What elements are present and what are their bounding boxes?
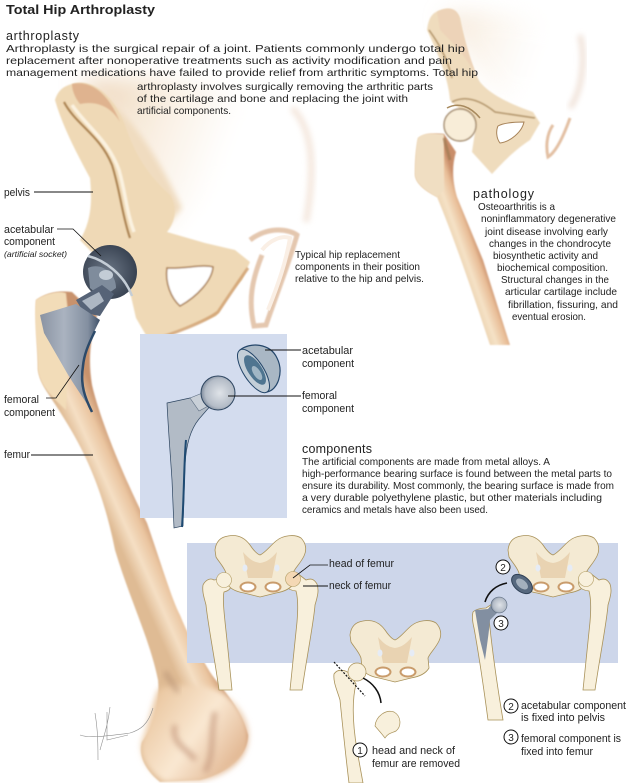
step 1 caption: head and neck of xyxy=(372,745,455,757)
step 3 caption: femoral component is xyxy=(521,733,621,745)
caption: typical components: relative to the hip and pelvis. xyxy=(295,274,424,285)
step marker 2 on diagram xyxy=(496,560,510,574)
label: femoral component: femoral xyxy=(4,394,39,406)
step marker 3 on diagram: 3 xyxy=(498,619,504,630)
label: femoral component, exploded xyxy=(228,390,354,415)
illustration: arthritic hip xyxy=(415,9,588,345)
section: arthroplasty text xyxy=(6,29,478,117)
caption: typical components: components in their position xyxy=(295,262,420,273)
section: arthroplasty text: arthroplasty xyxy=(6,29,80,43)
section: arthroplasty text: of the cartilage and bone and replacing the joint with xyxy=(137,94,408,105)
section: pathology: pathology xyxy=(473,187,535,201)
section: pathology: biochemical composition. xyxy=(497,263,608,274)
illustration: implant placement xyxy=(472,535,611,720)
section: pathology: noninflammatory degenerative xyxy=(481,214,616,225)
step 2 caption: acetabular component xyxy=(521,700,626,712)
label: neck of femur: neck of femur xyxy=(329,580,391,592)
label: acetabular component: component xyxy=(4,236,55,248)
label: acetabular component, exploded xyxy=(265,345,354,370)
panel: implant components xyxy=(140,334,287,528)
artificial socket xyxy=(83,245,137,299)
section: pathology: Osteoarthritis is a xyxy=(478,202,555,213)
signature xyxy=(80,707,153,760)
label: acetabular component xyxy=(4,224,101,259)
illustration: normal pelvis and femurs xyxy=(203,535,318,690)
femoral stem xyxy=(40,285,114,412)
section: components: ensure its durability. Most commonly, the bearing surface is made from xyxy=(302,481,614,492)
step marker 2 on diagram: 2 xyxy=(500,563,506,574)
label: pelvis: pelvis xyxy=(4,187,30,199)
section: pathology: fibrillation, fissuring, and xyxy=(508,300,618,311)
step 1 caption: 1 xyxy=(357,746,363,757)
label: femoral component, exploded: component xyxy=(302,403,354,415)
section: components: The artificial components are made from metal alloys. A xyxy=(302,457,550,468)
section: components xyxy=(302,442,614,516)
section: arthroplasty text: management medications have failed to provide relief from arthritic symptoms. Total hip xyxy=(6,68,478,79)
step 3 caption: 3 xyxy=(508,733,514,744)
step 3 caption: fixed into femur xyxy=(521,746,593,758)
femur xyxy=(415,134,510,345)
section: arthroplasty text: replacement after nonoperative treatments such as activity modification and pain xyxy=(6,56,452,67)
label: acetabular component, exploded: acetabular xyxy=(302,345,353,357)
label: femoral component: component xyxy=(4,407,55,419)
step 2 caption: 2 xyxy=(508,702,514,713)
label: acetabular component: (artificial socket) xyxy=(4,249,67,259)
label: femoral component xyxy=(4,365,79,419)
step 1 caption: femur are removed xyxy=(372,758,460,770)
panel: surgical steps xyxy=(187,535,618,783)
section: pathology: biosynthetic activity and xyxy=(493,251,598,262)
step marker 3 on diagram xyxy=(494,616,508,630)
femur xyxy=(35,291,248,782)
step 1 caption xyxy=(353,743,460,770)
label: neck of femur xyxy=(303,580,391,592)
section: pathology: Structural changes in the xyxy=(501,275,609,286)
femoral head xyxy=(444,109,476,141)
label: femoral component, exploded: femoral xyxy=(302,390,337,402)
obturator foramen xyxy=(167,266,213,306)
illustration: head and neck removed xyxy=(334,620,441,783)
section: components: ceramics and metals have also been used. xyxy=(302,505,488,516)
label: acetabular component, exploded: component xyxy=(302,358,354,370)
section: pathology: changes in the chondrocyte xyxy=(489,239,611,250)
section: components: components xyxy=(302,442,373,456)
illustration: large hip and femur with implant xyxy=(35,77,314,782)
arrow: removal xyxy=(363,678,381,703)
cut line xyxy=(334,662,365,696)
section: components: high-performance bearing surface is found between the metal parts to xyxy=(302,469,612,480)
label: head of femur: head of femur xyxy=(329,558,394,570)
label: femur: femur xyxy=(4,449,30,461)
step 2 caption: is fixed into pelvis xyxy=(521,712,605,724)
label: femur xyxy=(4,449,93,461)
label: head of femur xyxy=(293,558,394,578)
arrow: insertion xyxy=(485,583,507,602)
icon: femoral stem xyxy=(167,376,235,528)
step 2 caption xyxy=(504,699,626,724)
label: acetabular component: acetabular xyxy=(4,224,54,236)
condyle xyxy=(141,685,248,782)
section: arthroplasty text: artificial components. xyxy=(137,106,231,117)
section: components: a very durable polyethylene plastic, but other materials including xyxy=(302,493,602,504)
section: pathology: joint disease involving early xyxy=(484,227,609,238)
section: arthroplasty text: Arthroplasty is the surgical repair of a joint. Patients commonly undergo total hip xyxy=(6,44,465,55)
step 3 caption xyxy=(504,730,621,758)
section: pathology: eventual erosion. xyxy=(512,312,586,323)
icon: acetabular cup xyxy=(231,345,280,397)
section: pathology: articular cartilage include xyxy=(505,287,617,298)
pelvis wing xyxy=(55,77,314,342)
section: arthroplasty text: arthroplasty involves surgically removing the arthritic parts xyxy=(137,82,433,93)
caption: typical components: Typical hip replacement xyxy=(295,250,400,261)
label: pelvis xyxy=(4,187,93,199)
title: Total Hip Arthroplasty xyxy=(6,2,156,17)
caption: typical components xyxy=(295,250,424,285)
icon: removed femoral head xyxy=(375,711,400,738)
section: pathology xyxy=(473,187,618,323)
